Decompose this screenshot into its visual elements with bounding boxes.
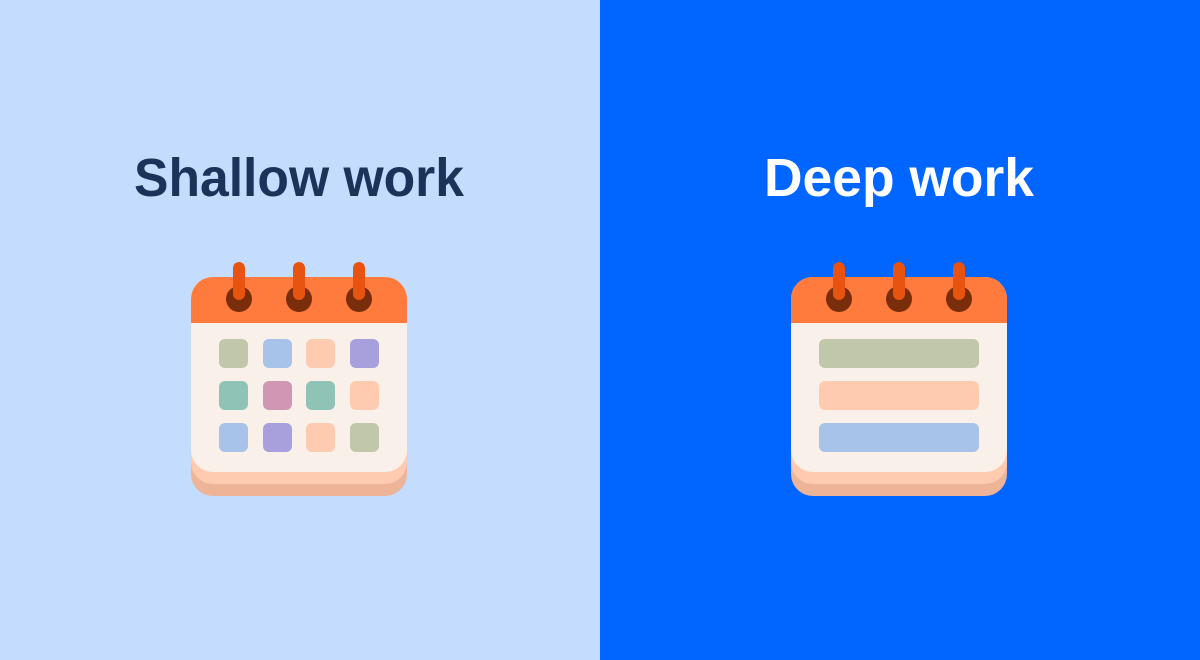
icon: calendar with grid xyxy=(191,262,407,496)
panel: shallow work xyxy=(0,0,600,660)
heading: deep work: Deep work xyxy=(764,148,1035,208)
heading: shallow work: Shallow work xyxy=(134,148,465,208)
icon: calendar with bars xyxy=(791,262,1007,496)
panel: deep work xyxy=(600,0,1200,660)
